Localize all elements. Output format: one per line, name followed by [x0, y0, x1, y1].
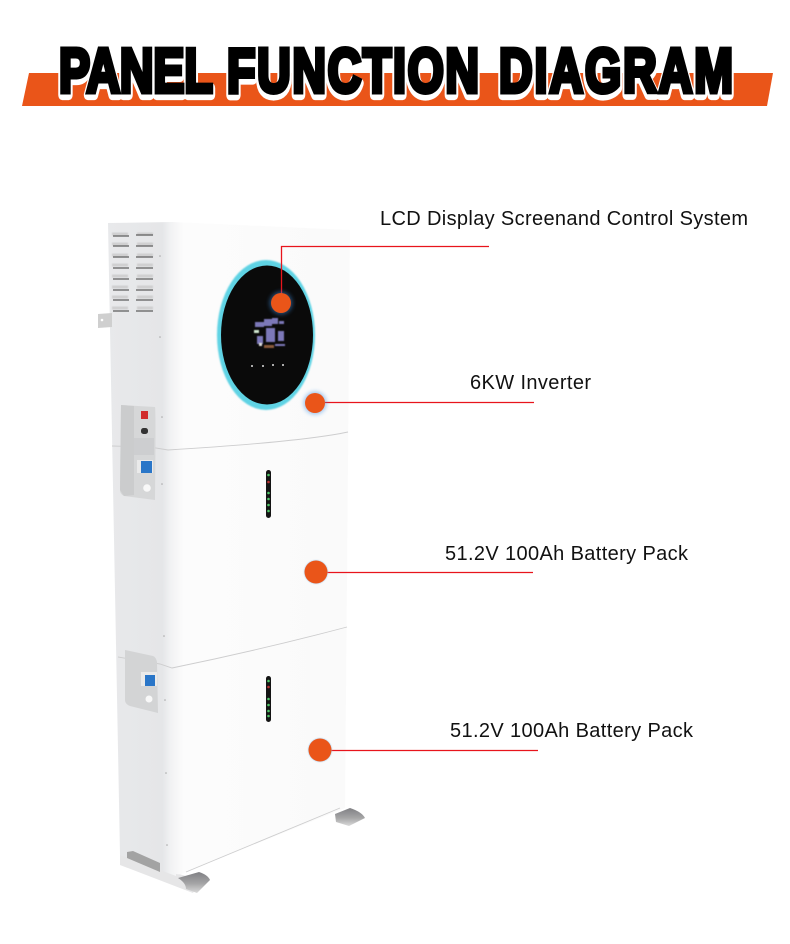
- title: DIAGRAM: [499, 35, 733, 106]
- battery indicator 1: [266, 470, 271, 518]
- screen readout: [254, 318, 285, 348]
- front panel: [171, 222, 350, 874]
- side panel: [108, 222, 176, 876]
- callout: LCD display: [270, 208, 748, 314]
- callout: inverter: 6KW Inverter: [470, 372, 591, 394]
- callout: inverter: [304, 372, 591, 414]
- title: FUNCTION: [227, 35, 479, 106]
- callout: battery pack 2: 51.2V 100Ah Battery Pack: [450, 720, 694, 742]
- title banner: [22, 73, 773, 106]
- mounting bracket: [98, 313, 112, 328]
- title: FUNCTION: [227, 38, 479, 109]
- callout: battery pack 1: [304, 543, 689, 584]
- feet: [178, 808, 365, 893]
- title: PANEL: [59, 35, 213, 106]
- battery indicator 2: [266, 676, 271, 722]
- callout: LCD display: LCD Display Screenand Control System: [380, 208, 748, 230]
- callout: battery pack 2: [308, 720, 694, 762]
- base plate: [120, 853, 200, 893]
- lower breaker recess: [125, 650, 158, 713]
- upper breaker recess: [120, 405, 156, 500]
- side rivets: [159, 255, 168, 846]
- module seams: [112, 432, 348, 872]
- title: [59, 35, 733, 109]
- callout: battery pack 1: 51.2V 100Ah Battery Pack: [445, 543, 689, 565]
- title: PANEL: [59, 38, 213, 109]
- rear foot: [127, 851, 160, 872]
- product: battery inverter cabinet: [98, 222, 365, 893]
- title: DIAGRAM: [499, 38, 733, 109]
- ventilation slots: [112, 234, 153, 311]
- inverter display: [217, 260, 315, 410]
